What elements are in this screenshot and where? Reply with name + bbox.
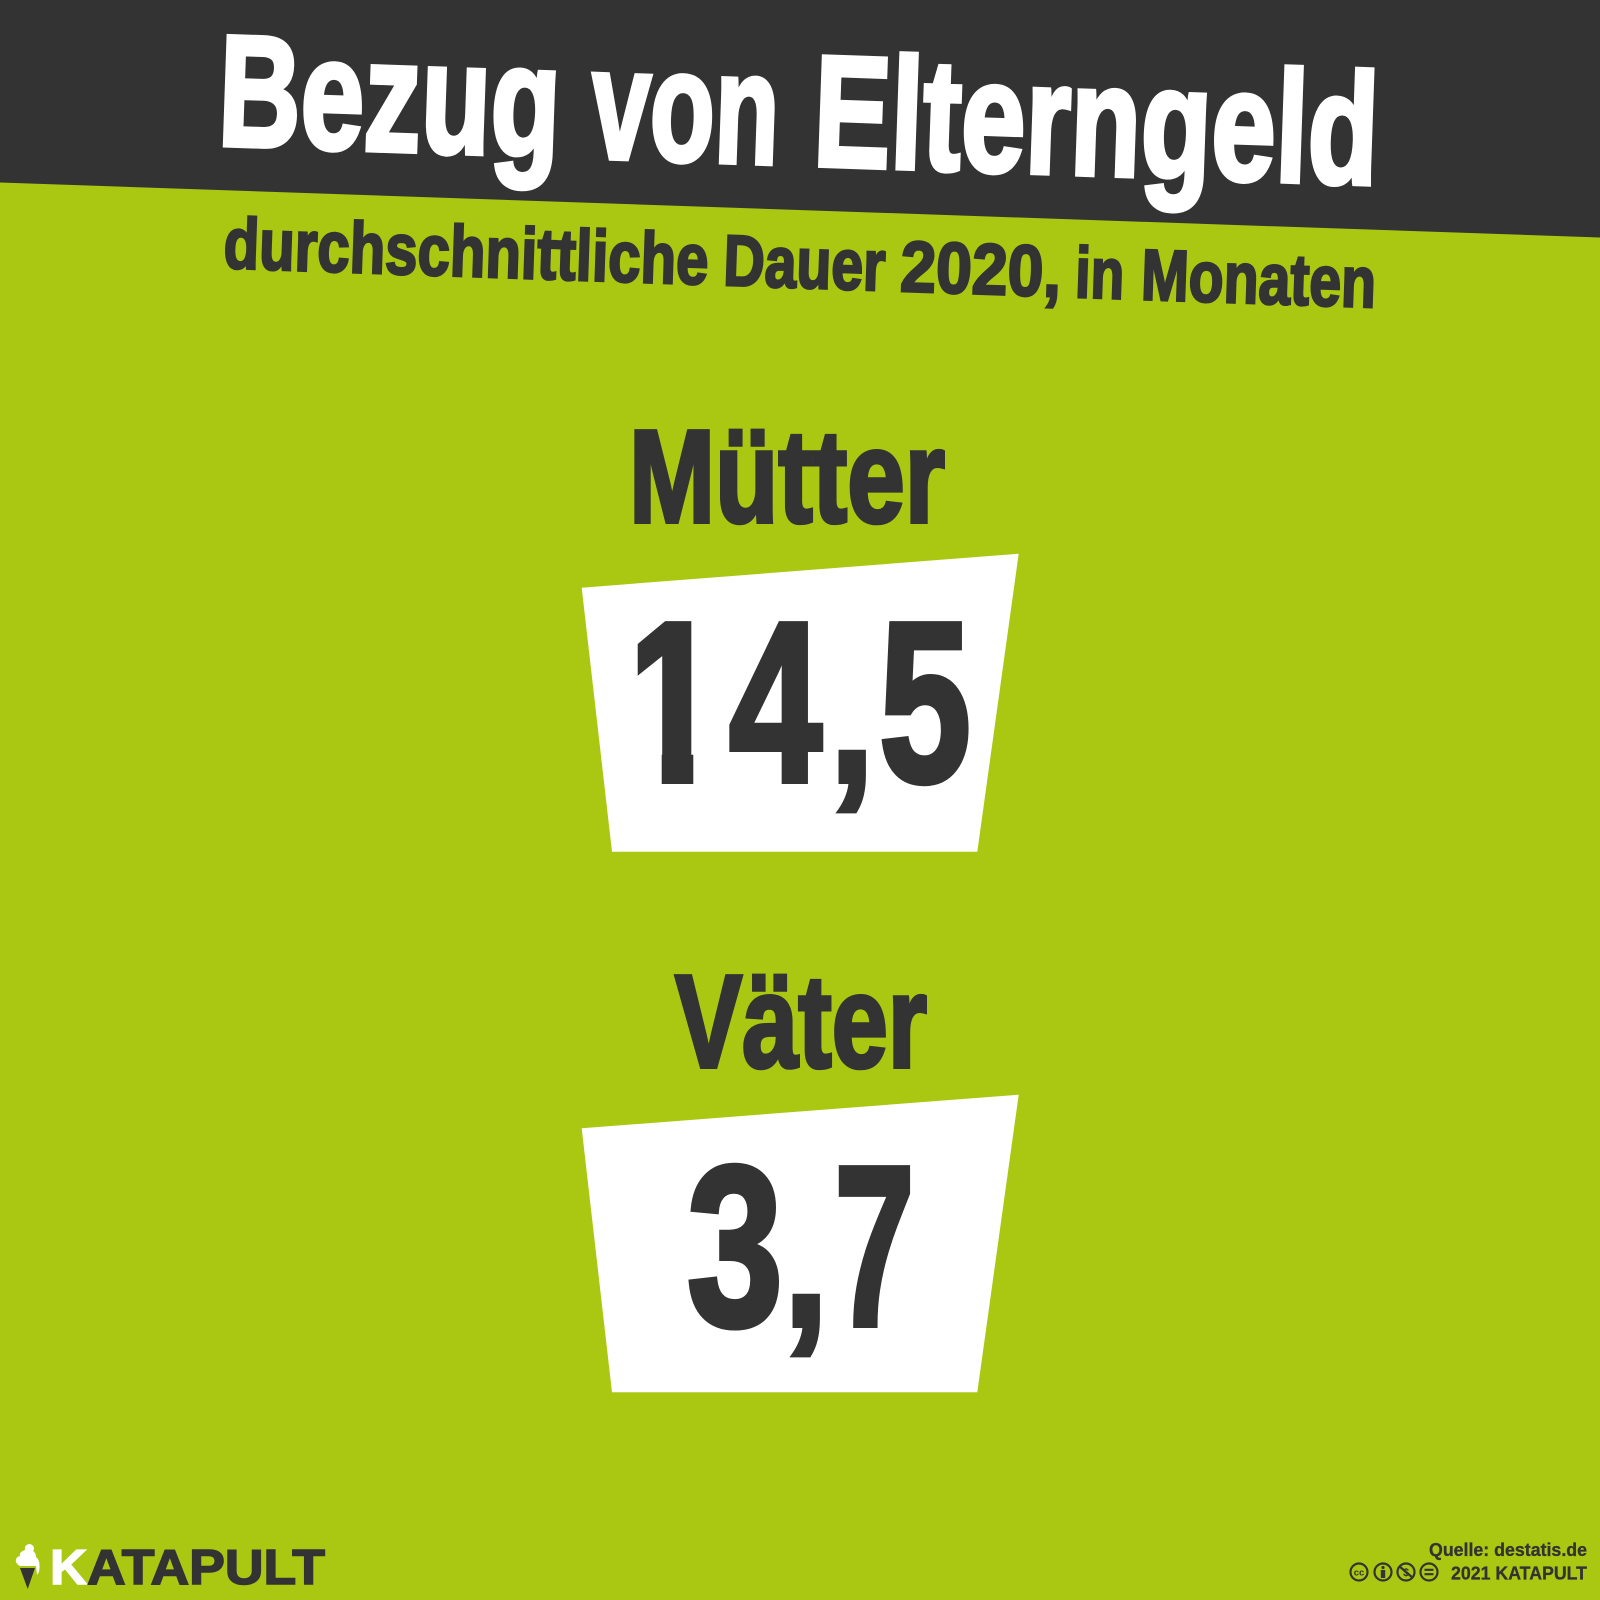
title (216, 3, 1382, 218)
value: 14,5: , (830, 610, 874, 822)
license icons (1350, 1564, 1438, 1580)
title: Elterngeld (811, 23, 1382, 218)
subtitle: durchschnittliche (222, 204, 710, 301)
value: 14,5: 4 (729, 576, 822, 830)
logo: KATAPULT (16, 1541, 325, 1595)
value: 14,5: 5 (879, 576, 971, 830)
value: 14,5 (620, 576, 971, 830)
label: Mütter: Mütter (629, 403, 945, 550)
icon: ice cream cone (16, 1544, 40, 1589)
value: 3,7: , (784, 1154, 828, 1366)
value box: mothers (582, 554, 1019, 852)
value: 3,7 (687, 1120, 914, 1374)
icon: non-commercial: $ (1403, 1567, 1409, 1579)
logo letter K: K (50, 1541, 87, 1595)
panel: mothers (582, 403, 1019, 852)
icon: cc: cc (1354, 1568, 1364, 1578)
subtitle: 2020, (899, 227, 1063, 313)
header band (0, 0, 1600, 238)
icon: no derivatives (1420, 1564, 1438, 1580)
value: 3,7: 7 (834, 1120, 914, 1374)
title: von (589, 16, 783, 198)
value box: fathers (582, 1095, 1019, 1392)
value: 14,5: 1 (623, 576, 722, 830)
copyright text: 2021 KATAPULT (1451, 1563, 1587, 1583)
panel: fathers (582, 948, 1019, 1392)
label: Väter: Väter (675, 948, 927, 1095)
subtitle (222, 204, 1378, 323)
subtitle: Dauer (722, 221, 887, 307)
icon: attribution (1374, 1564, 1392, 1580)
value: 3,7: 3 (687, 1120, 783, 1374)
logo letters ATAPULT: ATAPULT (87, 1541, 325, 1595)
subtitle: in (1074, 233, 1126, 315)
source text: Quelle: destatis.de (1429, 1540, 1587, 1560)
title: Bezug (216, 3, 564, 190)
subtitle: Monaten (1140, 235, 1378, 323)
